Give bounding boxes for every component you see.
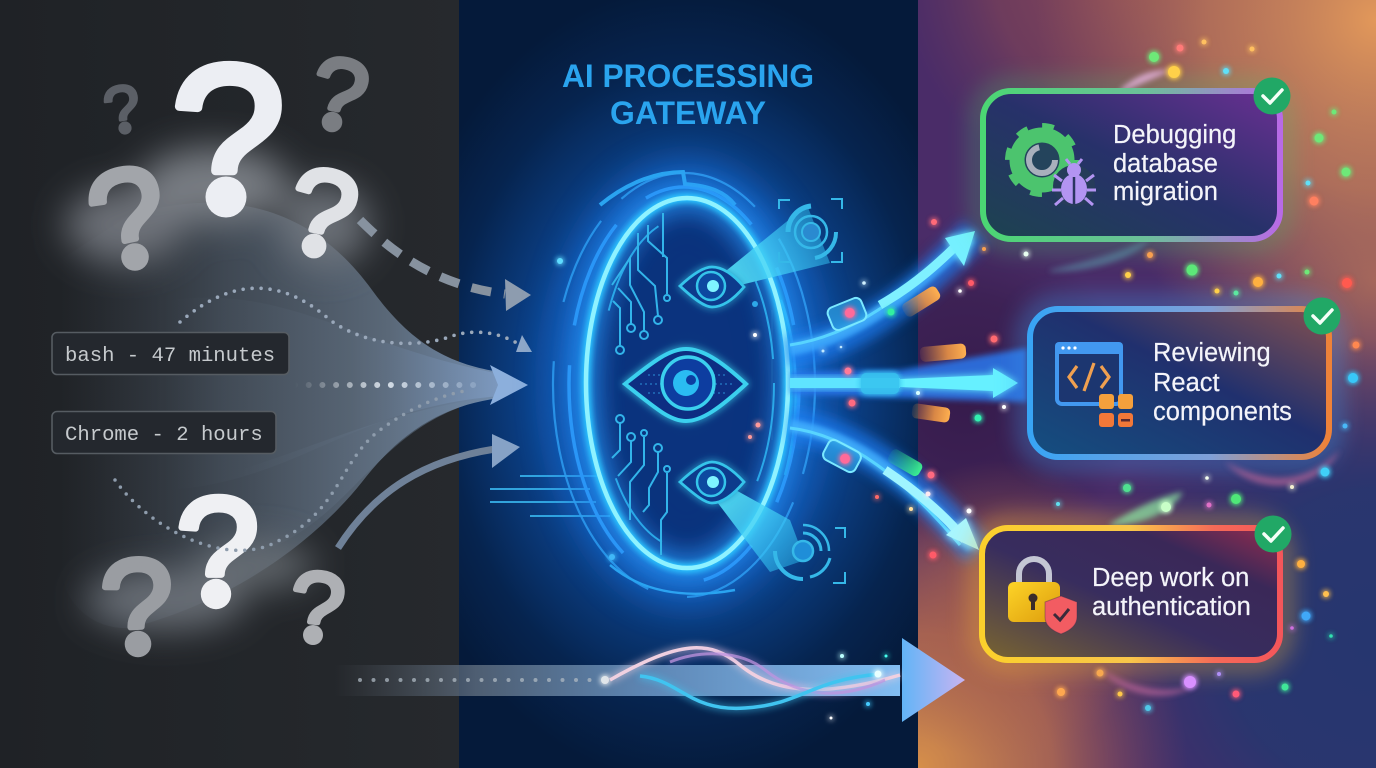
icon: code window and blocks <box>1055 342 1133 427</box>
data chip: lower cyan <box>821 438 863 474</box>
cloud: bottom <box>85 541 315 630</box>
badge: check <box>1254 78 1290 114</box>
status label: Chrome: Chrome - 2 hours <box>65 424 263 447</box>
bottom arrow: timeline <box>335 638 965 722</box>
portal: halo <box>575 185 799 581</box>
title <box>562 58 814 131</box>
dotted line: central stream <box>295 382 480 388</box>
question marks: top group: ? <box>98 69 147 148</box>
status label: bash: bash - 47 minutes <box>65 345 275 368</box>
data chip: green <box>886 447 924 478</box>
portal: glow ring <box>586 198 788 568</box>
stream: middle <box>790 348 1027 402</box>
question marks: bottom group: ? <box>176 466 259 634</box>
label: card 2: components <box>1153 398 1292 426</box>
question marks: top group: ? <box>171 24 285 252</box>
label: card 1: migration <box>1113 178 1218 206</box>
card: reviewing React components <box>1030 298 1340 457</box>
portal: circuit traces <box>612 213 670 555</box>
AI gateway portal <box>553 172 845 597</box>
eye: top <box>680 267 744 307</box>
question marks: top group: ? <box>75 135 182 301</box>
label: card 3: authentication <box>1092 593 1251 621</box>
label: card 2: React <box>1153 369 1220 397</box>
icon: gear and bug <box>1009 127 1096 207</box>
question marks: top group: ? <box>276 140 369 285</box>
label: card 2: Reviewing <box>1153 339 1271 367</box>
beam: bottom <box>708 478 805 572</box>
data streams to cards <box>785 231 1027 552</box>
circuit input lines <box>490 476 610 516</box>
question marks: bottom group: ? <box>284 549 350 664</box>
stream: lower <box>790 425 979 552</box>
cloud: top <box>65 147 370 267</box>
data chip: upper cyan <box>826 296 868 332</box>
particle streaks <box>1050 70 1340 696</box>
title: GATEWAY <box>610 95 766 131</box>
question marks: bottom group: ? <box>97 530 178 681</box>
status label: Chrome <box>52 412 276 454</box>
data chip: upper orange <box>900 285 942 319</box>
data chip: middle orange <box>919 343 967 362</box>
dotted arrow: lower <box>115 390 470 550</box>
title: AI PROCESSING <box>562 58 814 94</box>
stream: upper <box>785 231 975 352</box>
question marks: top group <box>75 24 378 301</box>
particles: glowing dots <box>822 40 1360 711</box>
data chip: low orange <box>911 403 951 423</box>
target icon: bottom <box>775 525 845 583</box>
dotted arrow: upper <box>180 288 532 352</box>
label: card 3: Deep work on <box>1092 564 1249 592</box>
arrow: main funnel head <box>490 365 528 405</box>
dashed arrow: top <box>360 220 531 311</box>
panel: centre background <box>459 0 918 768</box>
beam: top <box>716 205 830 290</box>
card: deep work on authentication <box>982 516 1292 660</box>
label: card 1: database <box>1113 150 1218 178</box>
card glows <box>979 88 1332 663</box>
icon: padlock with shield <box>1008 559 1077 634</box>
status label: bash <box>52 332 289 374</box>
label: card 1: Debugging <box>1113 121 1236 149</box>
portal: sparkles <box>557 258 760 560</box>
data chip: centre cyan <box>861 373 899 394</box>
badge: check <box>1304 298 1340 334</box>
card: debugging database migration <box>983 78 1290 239</box>
question marks: top group: ? <box>300 34 378 155</box>
solid arrow: lower <box>338 434 520 548</box>
question marks: bottom group <box>97 466 350 681</box>
portal: inner fill <box>589 201 785 565</box>
eye: centre <box>625 349 746 421</box>
eye: bottom <box>680 462 744 503</box>
panel: right background <box>918 0 1376 768</box>
portal: outer arcs <box>553 172 815 597</box>
funnel of blurred context <box>60 203 500 628</box>
panel: left background <box>0 0 459 768</box>
badge: check <box>1254 516 1292 552</box>
target icon: top <box>779 199 842 262</box>
